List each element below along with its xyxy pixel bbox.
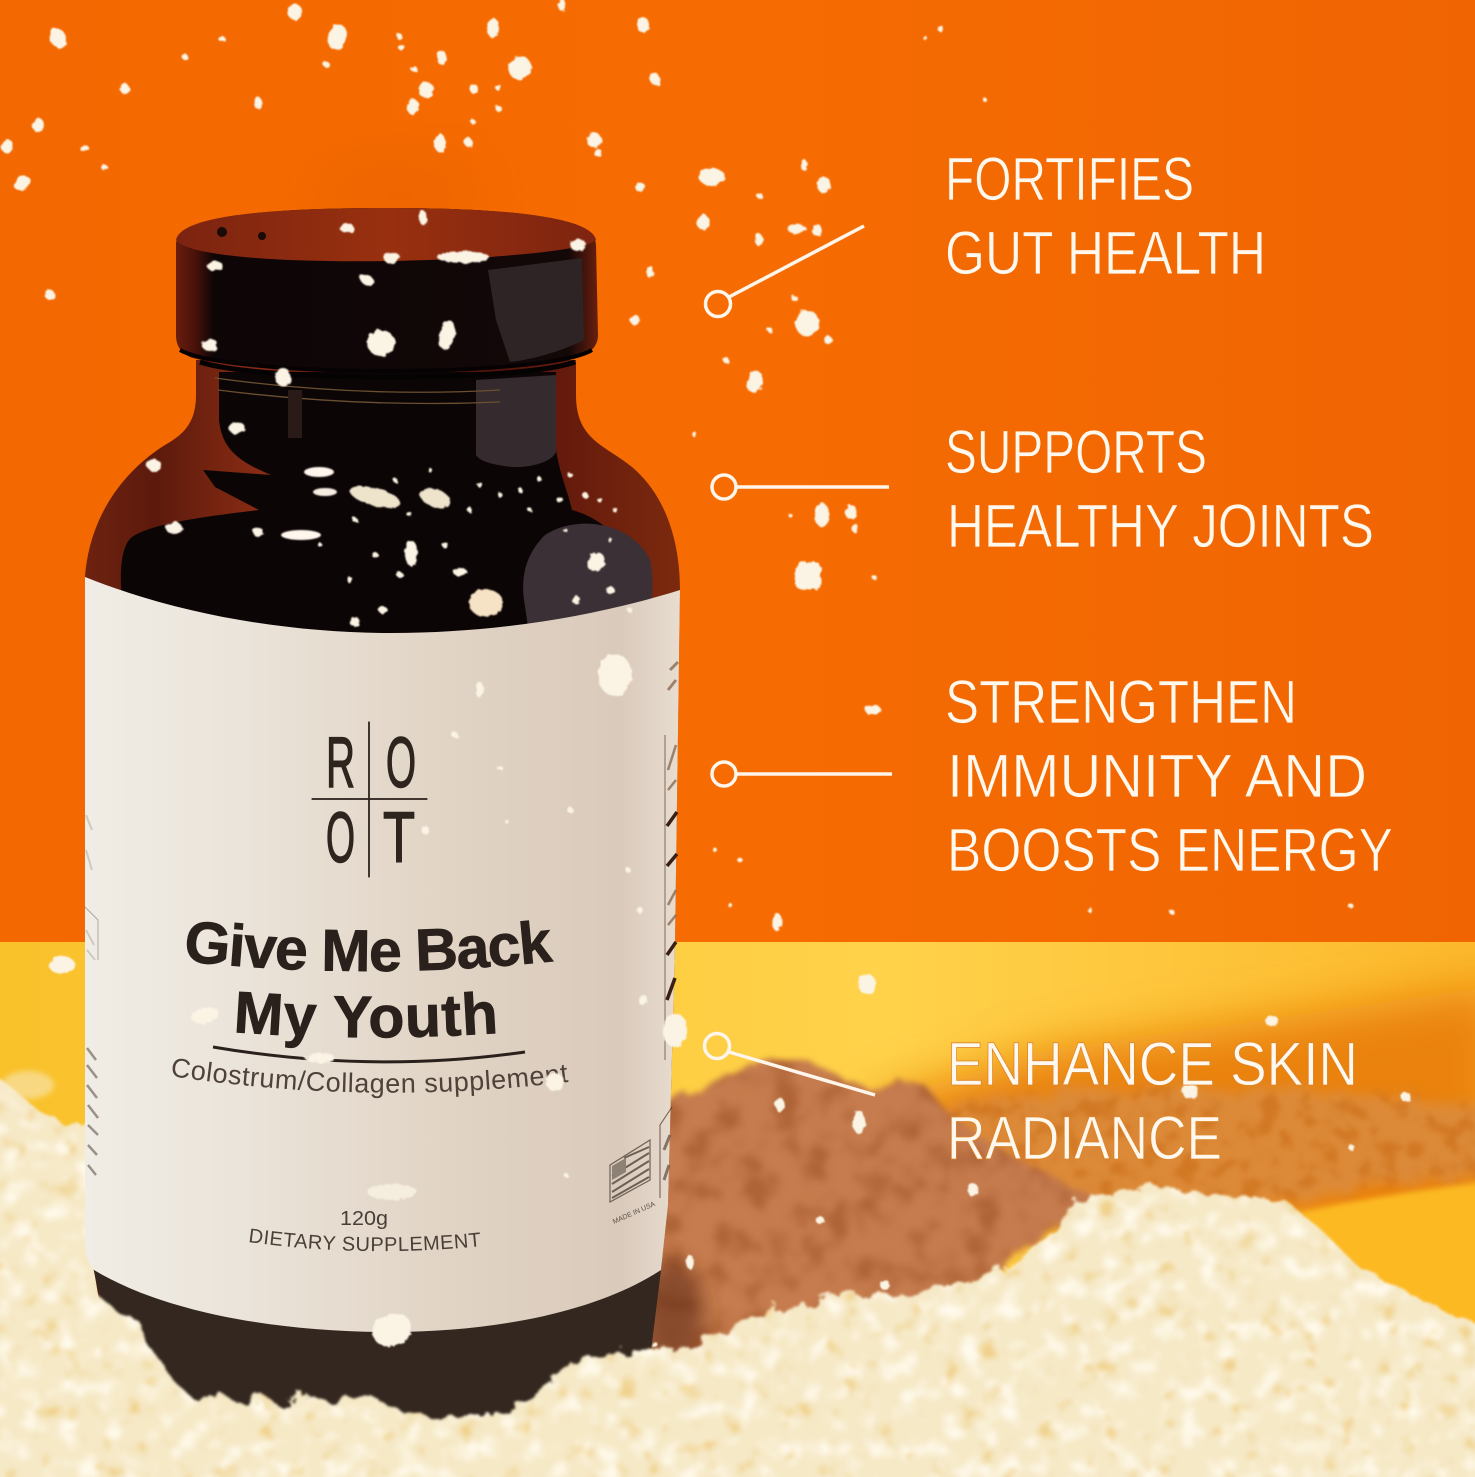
callout: enhance skin radiance [704, 1030, 1358, 1172]
brand logo: ROOT: R [326, 724, 355, 803]
bottle cap [176, 208, 598, 377]
base of the bottle seen below the label [92, 1262, 662, 1440]
dietary supplement note: DIETARY SUPPLEMENT [250, 1228, 480, 1252]
callout: supports healthy joints [712, 418, 1374, 560]
product name: My Youth [236, 991, 496, 1048]
powder: orange-brown spread on the right [930, 1087, 1475, 1270]
particles: lower right [49, 848, 1411, 1348]
powder: cream foreground pile [0, 1190, 1475, 1477]
product name: Give Me Back [186, 920, 554, 972]
callout: fortifies gut health [706, 145, 1266, 316]
glass highlights [215, 375, 652, 640]
brand logo: ROOT [312, 722, 427, 878]
product name [186, 920, 554, 1048]
icon: made in USA flag: MADE IN USA [612, 1201, 657, 1226]
heading: gut health: FORTIFIES [945, 145, 1194, 213]
particles: top band [1, 0, 987, 300]
particles: on cap and bottle [147, 211, 632, 627]
product label [84, 577, 680, 1332]
side panel stripes on the left edge [85, 815, 98, 1175]
underline [213, 1047, 525, 1062]
yellow table patch right of pile [1290, 1180, 1475, 1340]
heading: skin: ENHANCE SKIN [947, 1030, 1358, 1098]
product descriptor: Colostrum/Collagen supplement [172, 1058, 568, 1098]
heading: immunity: STRENGTHEN [945, 668, 1297, 736]
powder: brown pile [650, 1058, 1100, 1370]
side panel stripes on the right edge [660, 662, 678, 1198]
heading: joints: HEALTHY JOINTS [947, 492, 1374, 560]
bottle body glass [85, 360, 680, 1430]
callout: strengthen immunity and boosts energy [712, 668, 1393, 884]
product bottle [84, 208, 680, 1422]
heading: immunity: BOOSTS ENERGY [947, 816, 1393, 884]
heading: joints [945, 418, 1374, 560]
connector: skin [704, 1034, 875, 1095]
particles: around first callout [630, 159, 881, 715]
heading: gut health [945, 145, 1266, 287]
brand logo: ROOT: O [326, 799, 355, 878]
connector: joints [712, 475, 889, 499]
heading: immunity: IMMUNITY AND [947, 742, 1367, 810]
heading: joints: SUPPORTS [945, 418, 1207, 486]
heading: skin: RADIANCE [947, 1104, 1222, 1172]
dark reflection in the glass [121, 372, 656, 650]
heading: gut health: GUT HEALTH [945, 219, 1266, 287]
net weight: 120g [340, 1208, 388, 1230]
icon: made in USA flag [610, 1140, 657, 1226]
background: orange wall [0, 0, 1475, 945]
heading: immunity [945, 668, 1393, 884]
shadow at bottle base [640, 1260, 704, 1370]
connector: gut health [706, 226, 864, 316]
particles: on label [189, 654, 648, 1352]
connector: immunity [712, 762, 892, 786]
brand logo: ROOT: O [386, 724, 416, 803]
brand logo: ROOT: T [383, 799, 415, 878]
powder: cream mound left of bottle [0, 1060, 130, 1477]
background: yellow table with orange shadow [0, 942, 1475, 1477]
heading: skin [947, 1030, 1358, 1172]
